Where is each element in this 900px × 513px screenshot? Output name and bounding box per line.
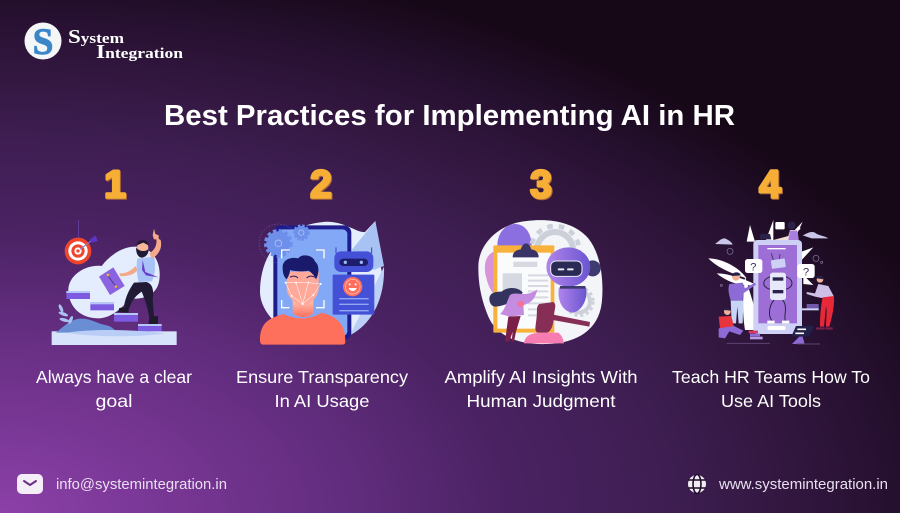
illustration 1: man climbing steps to a target xyxy=(52,220,177,345)
step 2 number: 2 xyxy=(311,164,333,208)
step 3 label: Human Judgment xyxy=(466,391,616,411)
step 2 number: 2 xyxy=(310,164,332,206)
step 1 label: Always have a clear xyxy=(36,367,192,387)
logo: System Integration: System xyxy=(68,26,125,48)
step 3 number: 3 xyxy=(530,164,552,206)
step 2 label xyxy=(236,367,408,411)
illustration 2: face recognition with robot xyxy=(259,221,384,345)
question bubble right: ? xyxy=(803,267,809,279)
books and lectern xyxy=(727,326,820,344)
gavel xyxy=(524,302,590,343)
icon: envelope xyxy=(17,474,43,494)
target icon xyxy=(65,235,98,264)
step 2 label: Ensure Transparency xyxy=(236,367,408,387)
logo: System Integration xyxy=(24,22,184,63)
illustration 3: robot, clipboard and gavel xyxy=(478,220,602,344)
scan frame corners xyxy=(282,250,324,308)
step 1 label: goal xyxy=(96,391,132,411)
step 4 label: Teach HR Teams How To xyxy=(672,367,870,387)
title: Best Practices for Implementing AI in HR xyxy=(164,100,735,132)
step 4 number: 4 xyxy=(760,164,782,208)
robot on phone xyxy=(764,253,792,323)
man xyxy=(118,229,161,324)
step 3 label xyxy=(444,367,638,411)
step 1 number: 1 xyxy=(104,164,126,206)
base platform xyxy=(52,331,177,345)
right man in red trousers xyxy=(802,276,834,330)
phone xyxy=(273,225,351,340)
step 4 label xyxy=(672,367,870,411)
step 2 label: In AI Usage xyxy=(274,391,370,411)
robot head xyxy=(546,247,601,313)
clipboard xyxy=(493,243,554,333)
robot xyxy=(333,247,374,315)
phone xyxy=(753,240,802,334)
standing man xyxy=(728,272,756,323)
email address: info@systemintegration.in xyxy=(56,477,227,493)
step 4 number: 4 xyxy=(759,164,781,206)
gear xyxy=(531,226,593,316)
person xyxy=(260,255,345,345)
briefcase xyxy=(99,267,125,295)
logo: System Integration: S xyxy=(33,22,53,63)
step 1 number: 1 xyxy=(105,164,127,208)
step 3 number: 3 xyxy=(531,164,553,208)
steps xyxy=(66,291,162,333)
illustration 4: team learning around a robot on a phone xyxy=(708,220,834,344)
step 4 label: Use AI Tools xyxy=(721,391,821,411)
question bubble left: ? xyxy=(750,262,756,274)
woman pointing xyxy=(489,288,537,342)
seated man xyxy=(719,308,743,338)
gears xyxy=(259,224,308,263)
step 3 label: Amplify AI Insights With xyxy=(444,367,638,387)
website address: www.systemintegration.in xyxy=(718,477,888,493)
icon: globe xyxy=(688,474,706,494)
logo: System Integration: Integration xyxy=(96,41,184,63)
top person with laptop xyxy=(759,221,800,240)
step 1 label xyxy=(36,367,192,411)
